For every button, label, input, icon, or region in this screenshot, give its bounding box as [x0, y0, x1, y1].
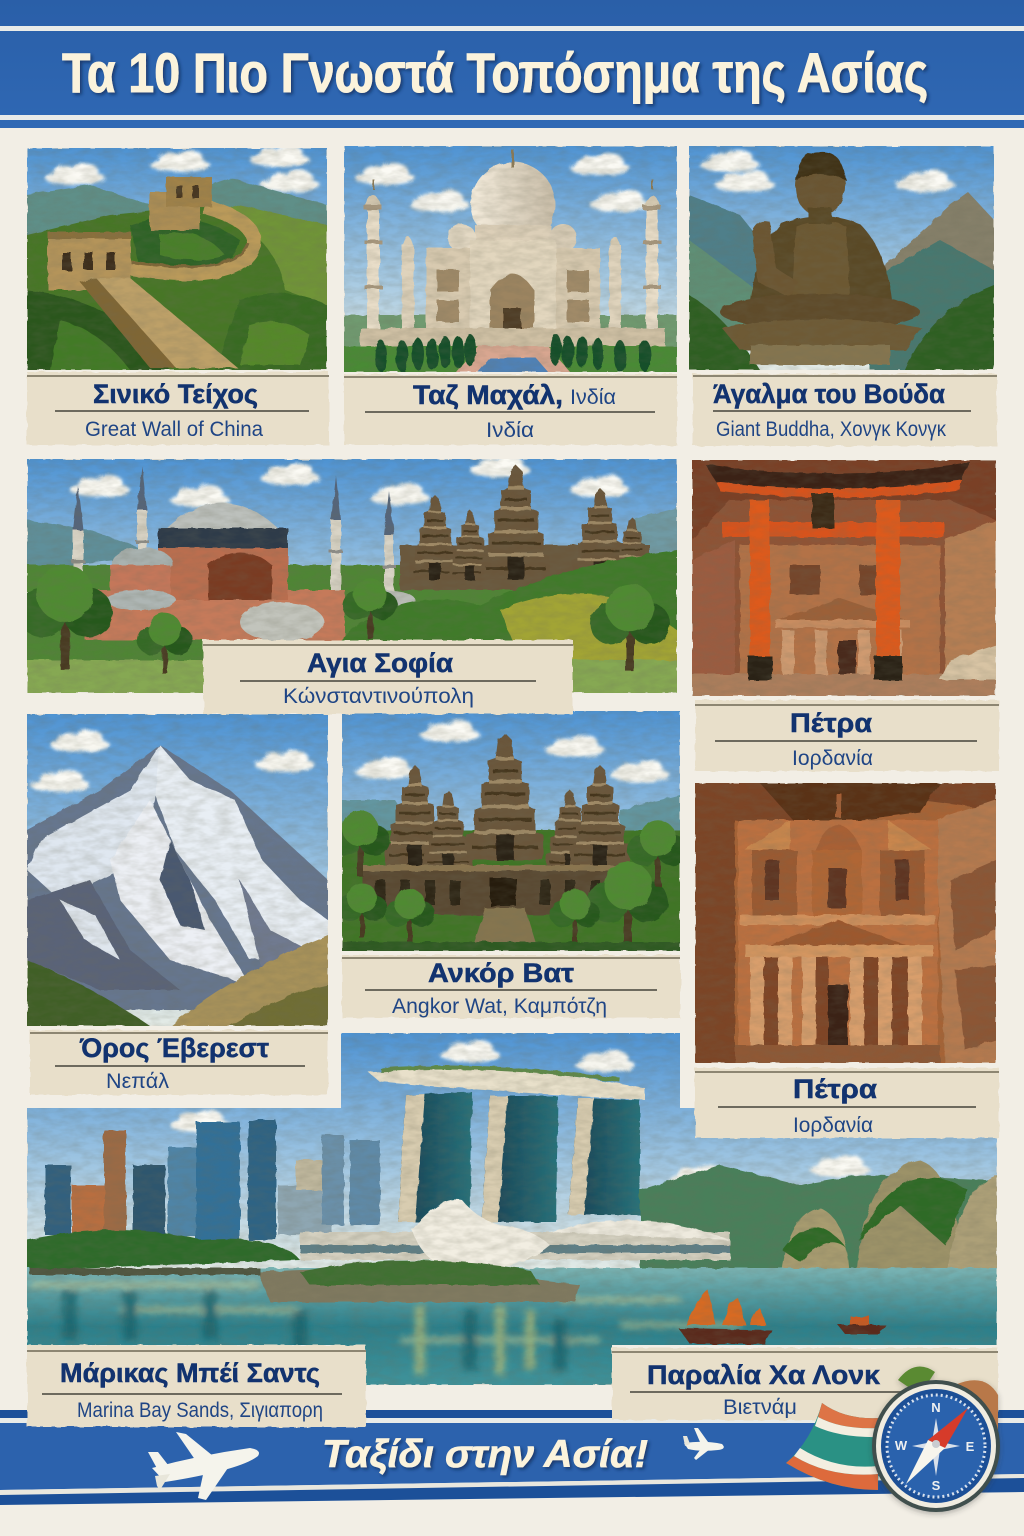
water reflections — [30, 1285, 740, 1375]
karst islands — [638, 1160, 997, 1270]
caption: Marina Bay Sands: Μάρικας Μπέί Σαντς — [60, 1358, 320, 1388]
icon: small airplane — [683, 1428, 724, 1460]
panel: Taj Mahal scene — [344, 146, 677, 372]
caption: Great Wall: Σινικό Τείχος — [93, 379, 258, 409]
caption: Marina Bay Sands — [27, 1345, 366, 1427]
panel: Mount Everest scene — [27, 714, 328, 1026]
caption: Taj Mahal: Ινδία — [486, 419, 534, 442]
panel: Giant Buddha scene — [689, 146, 994, 370]
caption: Petra lower — [695, 1068, 999, 1138]
caption: Angkor Wat — [342, 955, 680, 1018]
caption: Great Wall — [27, 372, 329, 445]
caption: Petra upper: Ιορδανία — [792, 747, 873, 770]
panel: Great Wall of China scene — [27, 145, 327, 370]
panel: Marina Bay and Ha Long Bay scene — [27, 1033, 997, 1385]
panel: Petra Treasury scene — [695, 783, 996, 1063]
caption: Ha Long Bay: Βιετνάμ — [723, 1396, 797, 1419]
caption: Hagia Sophia — [203, 640, 573, 714]
footer slogan: Ταξίδι στην Ασία! — [322, 1433, 648, 1476]
caption: Ha Long Bay: Παραλία Χα Λονκ — [647, 1360, 881, 1390]
caption: Mount Everest: Νεπάλ — [106, 1070, 170, 1093]
panel: torii and rock facade scene — [692, 460, 996, 696]
caption: Mount Everest: Όρος Έβερεστ — [79, 1033, 269, 1063]
icon: compass: E — [966, 1439, 975, 1454]
caption: Great Wall: Great Wall of China — [85, 418, 263, 441]
caption: Giant Buddha: Άγαλμα του Βούδα — [713, 379, 945, 409]
caption: Angkor Wat: Angkor Wat, Καμπότζη — [392, 995, 607, 1018]
header banner — [0, 0, 1024, 128]
caption: Taj Mahal — [344, 374, 677, 445]
caption: Giant Buddha: Giant Buddha, Χονγκ Κονγκ — [716, 418, 946, 441]
caption: Petra lower: Πέτρα — [793, 1074, 877, 1104]
skyline — [45, 1120, 380, 1240]
caption: Marina Bay Sands: Marina Bay Sands, Σιγιαπορη — [77, 1399, 323, 1422]
caption: Giant Buddha — [693, 374, 997, 446]
caption: Petra upper: Πέτρα — [790, 708, 872, 738]
caption: Petra upper — [695, 700, 999, 771]
icon: compass: N — [931, 1400, 941, 1415]
caption: Ha Long Bay — [612, 1348, 998, 1420]
icon: compass: S — [932, 1478, 941, 1493]
caption: Taj Mahal: Ινδία — [570, 386, 616, 409]
Marina Bay Sands — [300, 1068, 730, 1260]
junk boat — [678, 1290, 886, 1344]
caption: Petra lower: Ιορδανία — [793, 1114, 873, 1137]
caption: Mount Everest — [30, 1030, 328, 1095]
footer ribbon — [0, 1410, 1024, 1505]
icon: flag — [786, 1403, 880, 1490]
caption: Angkor Wat: Ανκόρ Βατ — [428, 958, 574, 988]
ArtScience Museum — [411, 1198, 550, 1267]
caption: Taj Mahal: Ταζ Μαχάλ, — [413, 380, 563, 410]
icon: large airplane — [148, 1432, 259, 1500]
caption: Hagia Sophia: Αγια Σοφία — [307, 648, 453, 678]
icon: compass — [872, 1367, 1000, 1512]
panel: Angkor Wat scene — [330, 711, 688, 951]
icon: compass: W — [895, 1438, 908, 1453]
caption: Hagia Sophia: Κώνσταντινούπολη — [283, 685, 474, 708]
panel: Hagia Sophia and Angkor scene — [17, 455, 677, 693]
